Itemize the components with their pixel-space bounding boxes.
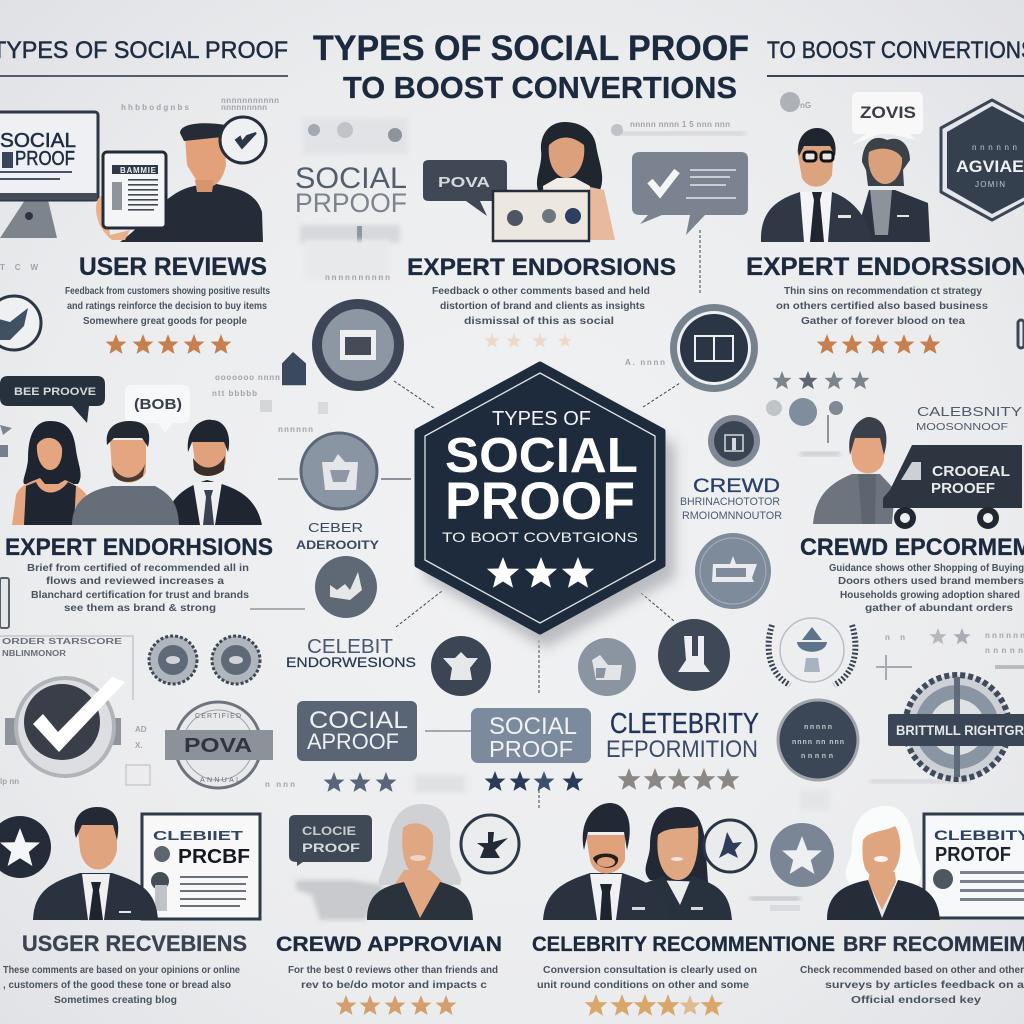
description: Thin sins on recommendation ct strategy bbox=[784, 286, 982, 297]
sign: social proof bbox=[295, 162, 407, 218]
rating stars bbox=[817, 334, 940, 354]
description: Official endorsed key bbox=[851, 995, 982, 1006]
description: Sometimes creating blog bbox=[54, 995, 177, 1006]
hexagon badge bbox=[941, 100, 1024, 220]
rating stars bbox=[585, 994, 723, 1016]
person with tablet: BAMMIE bbox=[120, 166, 157, 175]
crewd endorsement panel right bbox=[800, 404, 1024, 614]
description: user reviews: Feedback from customers showing positive results bbox=[65, 286, 270, 297]
panel: check badge bottom left: NBLINMONOR bbox=[2, 649, 66, 658]
speech bubble: pova: POVA bbox=[438, 174, 490, 191]
faint decorative marks: nnnnnn bbox=[985, 631, 1024, 640]
stars: cletebrity bbox=[618, 768, 739, 790]
panel: bright recommendation bbox=[770, 806, 1024, 1006]
box: cocial aproof bbox=[297, 701, 417, 761]
icon: pova badge: POVA bbox=[184, 735, 252, 757]
description: These comments are based on your opinions or online bbox=[3, 965, 240, 976]
description bbox=[829, 563, 1024, 614]
icon: check circle bbox=[461, 815, 519, 873]
panel: user recvebiens bbox=[0, 807, 260, 1006]
box: social proof: PROOF bbox=[489, 736, 573, 762]
woman with laptop bbox=[493, 122, 615, 241]
icon: monitor with social proof: PROOF bbox=[15, 148, 75, 170]
faint decorative marks: A. nnnn bbox=[625, 358, 665, 367]
description bbox=[537, 965, 757, 991]
heading: user reviews: USER REVIEWS bbox=[79, 253, 267, 281]
panel: check badge bottom left bbox=[0, 636, 133, 776]
man with beard bbox=[543, 803, 703, 920]
faint decorative marks: nnnnnnnnn bbox=[221, 103, 267, 112]
label: crewd: RMOIOMNNOUTOR bbox=[682, 510, 782, 522]
description: on others certified also based business bbox=[776, 301, 988, 312]
icon: pova badge: ANNUAL bbox=[200, 777, 240, 784]
label: calebrity bbox=[916, 404, 1022, 433]
label: cletebrity efpormition: EFPORMITION bbox=[606, 736, 758, 763]
faint decorative marks bbox=[0, 92, 1024, 911]
description: user reviews: and ratings reinforce the decision to buy items bbox=[67, 301, 267, 312]
icon: dark seal bbox=[778, 700, 858, 780]
label: crewd bbox=[680, 476, 782, 522]
faint decorative marks: nnnnnnnnnnn bbox=[221, 96, 279, 105]
icon: circle right middle bbox=[695, 533, 771, 609]
title: TO BOOST CONVERTIONS bbox=[343, 70, 737, 105]
speech bubble bbox=[851, 92, 923, 145]
description: Gather of forever blood on tea bbox=[801, 316, 965, 327]
central hexagon badge: SOCIAL bbox=[445, 429, 638, 483]
certificate card: PRCBF bbox=[178, 846, 250, 868]
speech bubble: PROOF bbox=[302, 841, 360, 855]
faint decorative marks: AD bbox=[135, 725, 147, 734]
central hexagon badge bbox=[417, 364, 675, 648]
sign: social proof: PRPOOF bbox=[295, 188, 407, 218]
icon: van crowd proof: PROOEF bbox=[931, 480, 995, 497]
central hexagon badge: TYPES OF bbox=[492, 408, 591, 430]
three people bbox=[12, 420, 262, 525]
rating stars bbox=[106, 334, 231, 354]
description: Brief from certified of recommended all in bbox=[27, 563, 249, 574]
central hexagon badge: TO BOOT COVBTGIONS bbox=[442, 529, 638, 545]
faint decorative marks: nnnnnn bbox=[278, 425, 313, 434]
label: celebrity endorsions small bbox=[286, 636, 416, 670]
icon: monitor with social proof: SOCIAL bbox=[0, 130, 76, 152]
expert endorsions panel left bbox=[0, 376, 273, 614]
description: expert endorsions bbox=[432, 286, 650, 327]
title: TYPES OF SOCIAL PROOF bbox=[313, 29, 749, 68]
card bbox=[924, 814, 1024, 918]
hexagon badge: nnnnnn bbox=[972, 143, 1017, 152]
speech bubble: see proove bbox=[0, 376, 105, 423]
connector lines bbox=[394, 230, 700, 810]
description: , customers of the good these tone or bread also bbox=[3, 980, 231, 991]
rating stars bbox=[336, 995, 456, 1015]
card: PROTOF bbox=[935, 844, 1011, 866]
icon: van crowd proof: CROOEAL bbox=[932, 463, 1010, 480]
icon: star circle bbox=[704, 820, 756, 872]
panel: check badge bottom left: ORDER STARSCORE bbox=[2, 637, 123, 646]
speech bubble: ZOVIS bbox=[860, 103, 916, 122]
faded hand bbox=[296, 880, 385, 920]
panel: celebrity recommendation bbox=[532, 803, 835, 1016]
faint decorative marks: nn bbox=[885, 633, 905, 642]
box: cocial aproof: COCIAL bbox=[309, 707, 408, 734]
label: cletebrity efpormition bbox=[606, 708, 759, 763]
icon: gear seal with banner bbox=[888, 675, 1024, 779]
description: Households growing adoption shared bbox=[840, 590, 1020, 601]
label: celebrity endorsions small: CELEBIT bbox=[307, 636, 393, 658]
left header: TYPES OF SOCIAL PROOF bbox=[0, 37, 288, 64]
description: rev to be/do motor and impacts c bbox=[301, 980, 488, 991]
icon: circle top-left bbox=[312, 299, 404, 391]
box: social proof bbox=[471, 708, 591, 763]
label: ceber adherence: CEBER bbox=[308, 520, 363, 535]
icon: scalloped badges pair bbox=[149, 636, 260, 684]
card: CLEBBITY bbox=[934, 827, 1024, 843]
description bbox=[800, 965, 1024, 1006]
icon: van crowd proof bbox=[883, 445, 1022, 529]
icon: circle left lower bbox=[315, 556, 377, 618]
speech bubble: CLOCIE bbox=[302, 824, 356, 838]
certificate card bbox=[142, 814, 260, 919]
faint decorative marks: lp nn bbox=[0, 777, 19, 786]
central hexagon badge: PROOF bbox=[445, 472, 635, 531]
sign: social proof: SOCIAL bbox=[295, 162, 407, 195]
icon: dark circle bbox=[658, 619, 730, 691]
speech bubble: pova bbox=[423, 160, 507, 216]
expert endorsements panel right bbox=[746, 92, 1024, 354]
icon: star circle bbox=[770, 823, 834, 887]
description: Blanchard certification for trust and brands bbox=[31, 590, 249, 601]
description: expert endorsions: dismissal of this as social bbox=[464, 316, 614, 327]
description bbox=[288, 965, 498, 991]
icon: pova badge: CERTIFIED bbox=[195, 713, 241, 720]
panel: crewd approvian bbox=[276, 804, 519, 1015]
description: Doors others used brand members bbox=[838, 576, 1024, 587]
person with tablet bbox=[96, 117, 266, 242]
icon: monitor with social proof bbox=[0, 112, 98, 238]
hexagon badge: JOMIN bbox=[975, 180, 1005, 189]
faint decorative marks: X. bbox=[135, 741, 143, 750]
faint decorative marks: T C W bbox=[0, 263, 38, 272]
description: Conversion consultation is clearly used on bbox=[543, 965, 757, 976]
description bbox=[3, 965, 240, 1006]
title bbox=[313, 29, 749, 105]
stars: social proof bbox=[485, 771, 583, 791]
description: expert endorsions: distortion of brand and clients as insights bbox=[440, 301, 645, 312]
woman dark hair bbox=[640, 807, 732, 920]
label: ceber adherence: ADEROOITY bbox=[296, 538, 379, 552]
label: crewd: CREWD bbox=[693, 476, 780, 497]
faint decorative marks: nG bbox=[800, 101, 811, 110]
faint decorative marks: nnnnn nnnn 1 5 nnn nnn bbox=[630, 120, 730, 129]
description: user reviews bbox=[65, 286, 270, 327]
heading: user recvebiens: USGER RECVEBIENS bbox=[22, 931, 247, 956]
faint decorative marks: nnnnnnnnnn bbox=[325, 273, 390, 282]
expert endorsements panel middle bbox=[295, 122, 748, 347]
description: gather of abundant orders bbox=[865, 603, 1014, 614]
speech bubble: check bbox=[632, 152, 748, 235]
icon: check circle left edge bbox=[0, 296, 41, 350]
icon: star circle bottom centre bbox=[431, 636, 491, 696]
stars: cocial aproof bbox=[324, 772, 396, 792]
icon: folder circle bbox=[578, 638, 636, 696]
hexagon badge: AGVIAE bbox=[956, 157, 1024, 176]
two men in suits bbox=[761, 128, 930, 242]
label: calebrity: MOOSONNOOF bbox=[916, 422, 1008, 433]
description: Check recommended based on other and other bbox=[800, 965, 1024, 976]
icon: pova badge bbox=[165, 702, 273, 788]
speech bubble: bob bbox=[125, 385, 190, 433]
description: flows and reviewed increases a bbox=[46, 576, 225, 587]
icon: star circle bbox=[0, 816, 51, 878]
faint decorative marks: ooooooo nnnn bbb bbox=[215, 373, 300, 382]
icon: scalloped badge top-right bbox=[670, 304, 758, 392]
description: see them as brand & strong bbox=[64, 603, 216, 614]
speech bubble: bob: (BOB) bbox=[134, 396, 182, 413]
faint decorative marks: nnnnn bbox=[985, 646, 1023, 655]
description: unit round conditions on other and some bbox=[537, 980, 749, 991]
heading: expert endorssion: EXPERT ENDORSSION bbox=[746, 253, 1024, 281]
description bbox=[27, 563, 249, 614]
icon: ring top of crewd bbox=[708, 415, 760, 467]
icon: dark seal: nnnnn bbox=[801, 753, 833, 760]
speech bubble bbox=[289, 815, 372, 866]
description: expert endorsions: Feedback o other comments based and held bbox=[432, 286, 650, 297]
description: For the best 0 reviews other than friends and bbox=[288, 965, 498, 976]
icon: laurel badge bbox=[769, 618, 855, 685]
faint decorative marks: hhbbodgnbs bbox=[121, 103, 190, 112]
label: celebrity endorsions small: ENDORWESIONS bbox=[286, 654, 416, 670]
box: social proof: SOCIAL bbox=[489, 713, 577, 740]
woman grey hair bbox=[367, 804, 473, 920]
heading: crewd approvian: CREWD APPROVIAN bbox=[276, 933, 502, 956]
icon: dark seal: nnnn nn nnn bbox=[792, 739, 844, 746]
faded stars bbox=[484, 333, 572, 347]
description: surveys by articles feedback on a bbox=[825, 980, 1024, 991]
icon: dark seal: nnnnn bbox=[804, 724, 832, 731]
man in grey suit bbox=[813, 417, 895, 524]
faint decorative marks: ntt bbbbb bbox=[212, 389, 257, 398]
man in suit bbox=[33, 807, 158, 920]
label: ceber adherence bbox=[296, 520, 379, 552]
heading: expert endorsions: EXPERT ENDORSIONS bbox=[407, 254, 676, 281]
description: user reviews: Somewhere great goods for people bbox=[83, 316, 247, 327]
description bbox=[776, 286, 988, 327]
certificate card: CLEBIIET bbox=[153, 828, 243, 843]
speech bubble: see proove: BEE PROOVE bbox=[14, 386, 96, 398]
heading: celebrity recommentione: CELEBRITY RECOMMENTIONE bbox=[532, 933, 835, 956]
box: cocial aproof: APROOF bbox=[307, 729, 399, 754]
label: crewd: BHRINACHOTOTOR bbox=[680, 496, 780, 508]
user reviews panel bbox=[0, 112, 270, 354]
label: cletebrity efpormition: CLETEBRITY bbox=[610, 708, 759, 740]
icon: circle left middle bbox=[301, 433, 377, 509]
label: calebrity: CALEBSNITY bbox=[917, 404, 1022, 419]
heading: expert endorhsions: EXPERT ENDORHSIONS bbox=[5, 534, 273, 561]
faint decorative marks: n nnn bbox=[265, 780, 295, 789]
woman white hair bbox=[827, 806, 940, 920]
